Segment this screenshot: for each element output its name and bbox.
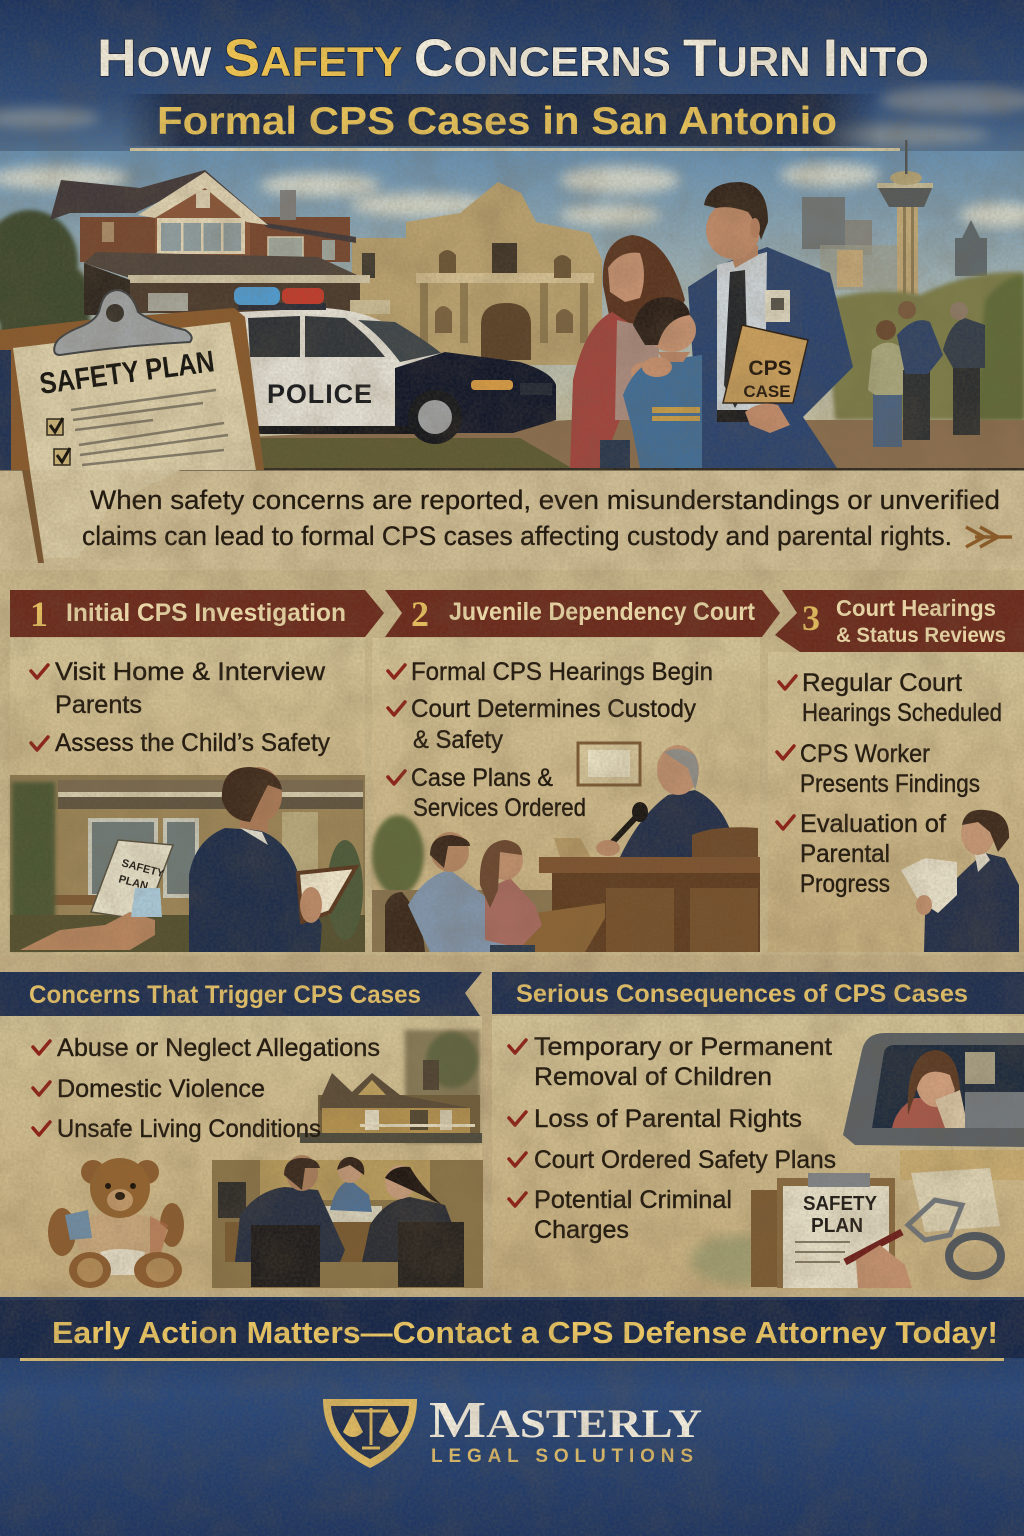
logo: Masterly Legal Solutions: LEGAL SOLUTIONS xyxy=(431,1446,693,1467)
intro text xyxy=(82,485,1000,551)
step 2 checklist: Case Plans & xyxy=(411,764,553,792)
intro text: When safety concerns are reported, even misunderstandings or unverified xyxy=(90,485,1000,515)
CPS folder: CASE xyxy=(743,382,791,401)
consequences checklist xyxy=(509,1033,836,1244)
step 2 checklist: Court Determines Custody xyxy=(411,695,696,723)
icon: double arrow xyxy=(966,527,1012,547)
person: child xyxy=(868,320,910,447)
ground xyxy=(250,420,1024,470)
band: lower sections xyxy=(0,955,1024,1300)
clouds xyxy=(0,163,1024,227)
call to action banner: Early Action Matters—Contact a CPS Defense Attorney Today! xyxy=(52,1315,998,1350)
person: boy xyxy=(623,297,702,468)
Alamo xyxy=(352,182,602,365)
logo: Masterly Legal Solutions: MASTERLY xyxy=(429,1392,702,1449)
step 3 heading ribbon: & Status Reviews xyxy=(836,624,1006,647)
clipboard: safety plan: SAFETY PLAN xyxy=(38,345,216,401)
step 3 heading ribbon: Court Hearings xyxy=(836,595,996,621)
concerns checklist xyxy=(33,1034,380,1143)
step 2 checklist: Services Ordered xyxy=(413,794,586,822)
step 1 heading ribbon: 1 xyxy=(30,594,48,634)
concerns heading ribbon xyxy=(0,972,482,1016)
consequences checklist: Charges xyxy=(534,1216,629,1244)
step 3 checklist: Parental xyxy=(800,840,890,868)
illustration: home visit: PLAN xyxy=(117,873,149,893)
step 1 heading ribbon xyxy=(10,590,384,637)
police car xyxy=(234,287,556,444)
title: Formal CPS Cases in San Antonio xyxy=(157,100,837,143)
house xyxy=(50,170,390,315)
illustration: child in car xyxy=(843,1033,1024,1147)
icon: shield with scales xyxy=(323,1399,417,1468)
step 2 heading ribbon: 2 xyxy=(411,594,429,634)
step 3 heading ribbon: 3 xyxy=(802,598,820,638)
logo: Masterly Legal Solutions xyxy=(323,1392,702,1468)
clip xyxy=(54,290,192,355)
consequences checklist: Court Ordered Safety Plans xyxy=(534,1146,836,1174)
panel: step 3 xyxy=(768,590,1024,952)
consequences heading ribbon: Serious Consequences of CPS Cases xyxy=(516,980,968,1008)
family xyxy=(570,182,853,470)
concerns checklist: Unsafe Living Conditions xyxy=(57,1115,321,1143)
step 1 heading ribbon: Initial CPS Investigation xyxy=(66,599,346,627)
step 2 heading ribbon xyxy=(385,590,780,637)
CPS folder xyxy=(723,325,808,433)
consequences checklist: Loss of Parental Rights xyxy=(534,1105,802,1133)
illustration: San Antonio scene xyxy=(0,140,1024,470)
intro band xyxy=(0,468,1024,570)
person: official xyxy=(943,302,985,435)
trees right xyxy=(825,272,1024,420)
illustration: teddy bear xyxy=(48,1158,184,1288)
step 2 checklist: Formal CPS Hearings Begin xyxy=(411,658,713,686)
step 3 checklist: Progress xyxy=(800,870,890,898)
CPS folder: CPS xyxy=(748,357,792,380)
police car: POLICE xyxy=(267,379,372,409)
panel: concerns xyxy=(0,972,483,1290)
step 3 heading ribbon xyxy=(775,590,1024,652)
step 2 heading ribbon: Juvenile Dependency Court xyxy=(449,598,756,626)
illustration: safety plan and handcuffs: SAFETY xyxy=(803,1193,878,1215)
consequences checklist: Removal of Children xyxy=(534,1063,772,1091)
clipboard: safety plan xyxy=(0,290,264,563)
illustration: meeting xyxy=(212,1155,483,1288)
step 3 checklist: Presents Findings xyxy=(800,770,980,798)
panel: consequences xyxy=(492,972,1024,1290)
illustration: home visit: SAFETY xyxy=(120,857,166,880)
header band xyxy=(0,0,1024,175)
step 1 checklist: Visit Home & Interview xyxy=(55,658,326,686)
step 3 checklist xyxy=(777,669,1002,898)
intro text: claims can lead to formal CPS cases affecting custody and parental rights. xyxy=(82,521,952,551)
background people xyxy=(868,301,985,447)
consequences checklist: Potential Criminal xyxy=(534,1186,732,1214)
illustration: safety plan and handcuffs: PLAN xyxy=(811,1215,863,1237)
call to action banner xyxy=(0,1300,1024,1361)
skyline and tower xyxy=(802,140,987,295)
consequences checklist: Temporary or Permanent xyxy=(534,1033,832,1061)
title xyxy=(97,29,929,151)
step 1 checklist: Assess the Child’s Safety xyxy=(55,729,330,757)
step 3 checklist: CPS Worker xyxy=(800,740,930,768)
step 2 checklist xyxy=(388,658,713,822)
footer background xyxy=(0,1297,1024,1536)
illustration: home visit xyxy=(10,767,365,952)
consequences heading ribbon xyxy=(492,972,1024,1014)
concerns heading ribbon: Concerns That Trigger CPS Cases xyxy=(29,981,421,1009)
illustration: house xyxy=(300,1030,482,1143)
step 3 checklist: Hearings Scheduled xyxy=(802,699,1002,727)
person: man with folder xyxy=(688,182,853,468)
illustration: safety plan and handcuffs xyxy=(690,1150,1024,1288)
step 2 checklist: & Safety xyxy=(413,726,503,754)
concerns checklist: Domestic Violence xyxy=(57,1075,265,1103)
panel: step 2 xyxy=(372,590,780,952)
step 3 checklist: Evaluation of xyxy=(800,810,946,838)
trees left xyxy=(0,210,92,350)
illustration: courtroom xyxy=(372,743,760,952)
person: adult xyxy=(897,301,943,440)
person: woman xyxy=(570,235,685,470)
title: HOW SAFETY CONCERNS TURN INTO xyxy=(97,29,929,88)
illustration: caseworker xyxy=(901,810,1019,952)
step 1 checklist: Parents xyxy=(55,691,142,719)
concerns checklist: Abuse or Neglect Allegations xyxy=(57,1034,380,1062)
step 1 checklist xyxy=(31,658,330,757)
divider strip xyxy=(0,570,1024,965)
panel: step 1 xyxy=(10,590,384,952)
step 3 checklist: Regular Court xyxy=(802,669,962,697)
